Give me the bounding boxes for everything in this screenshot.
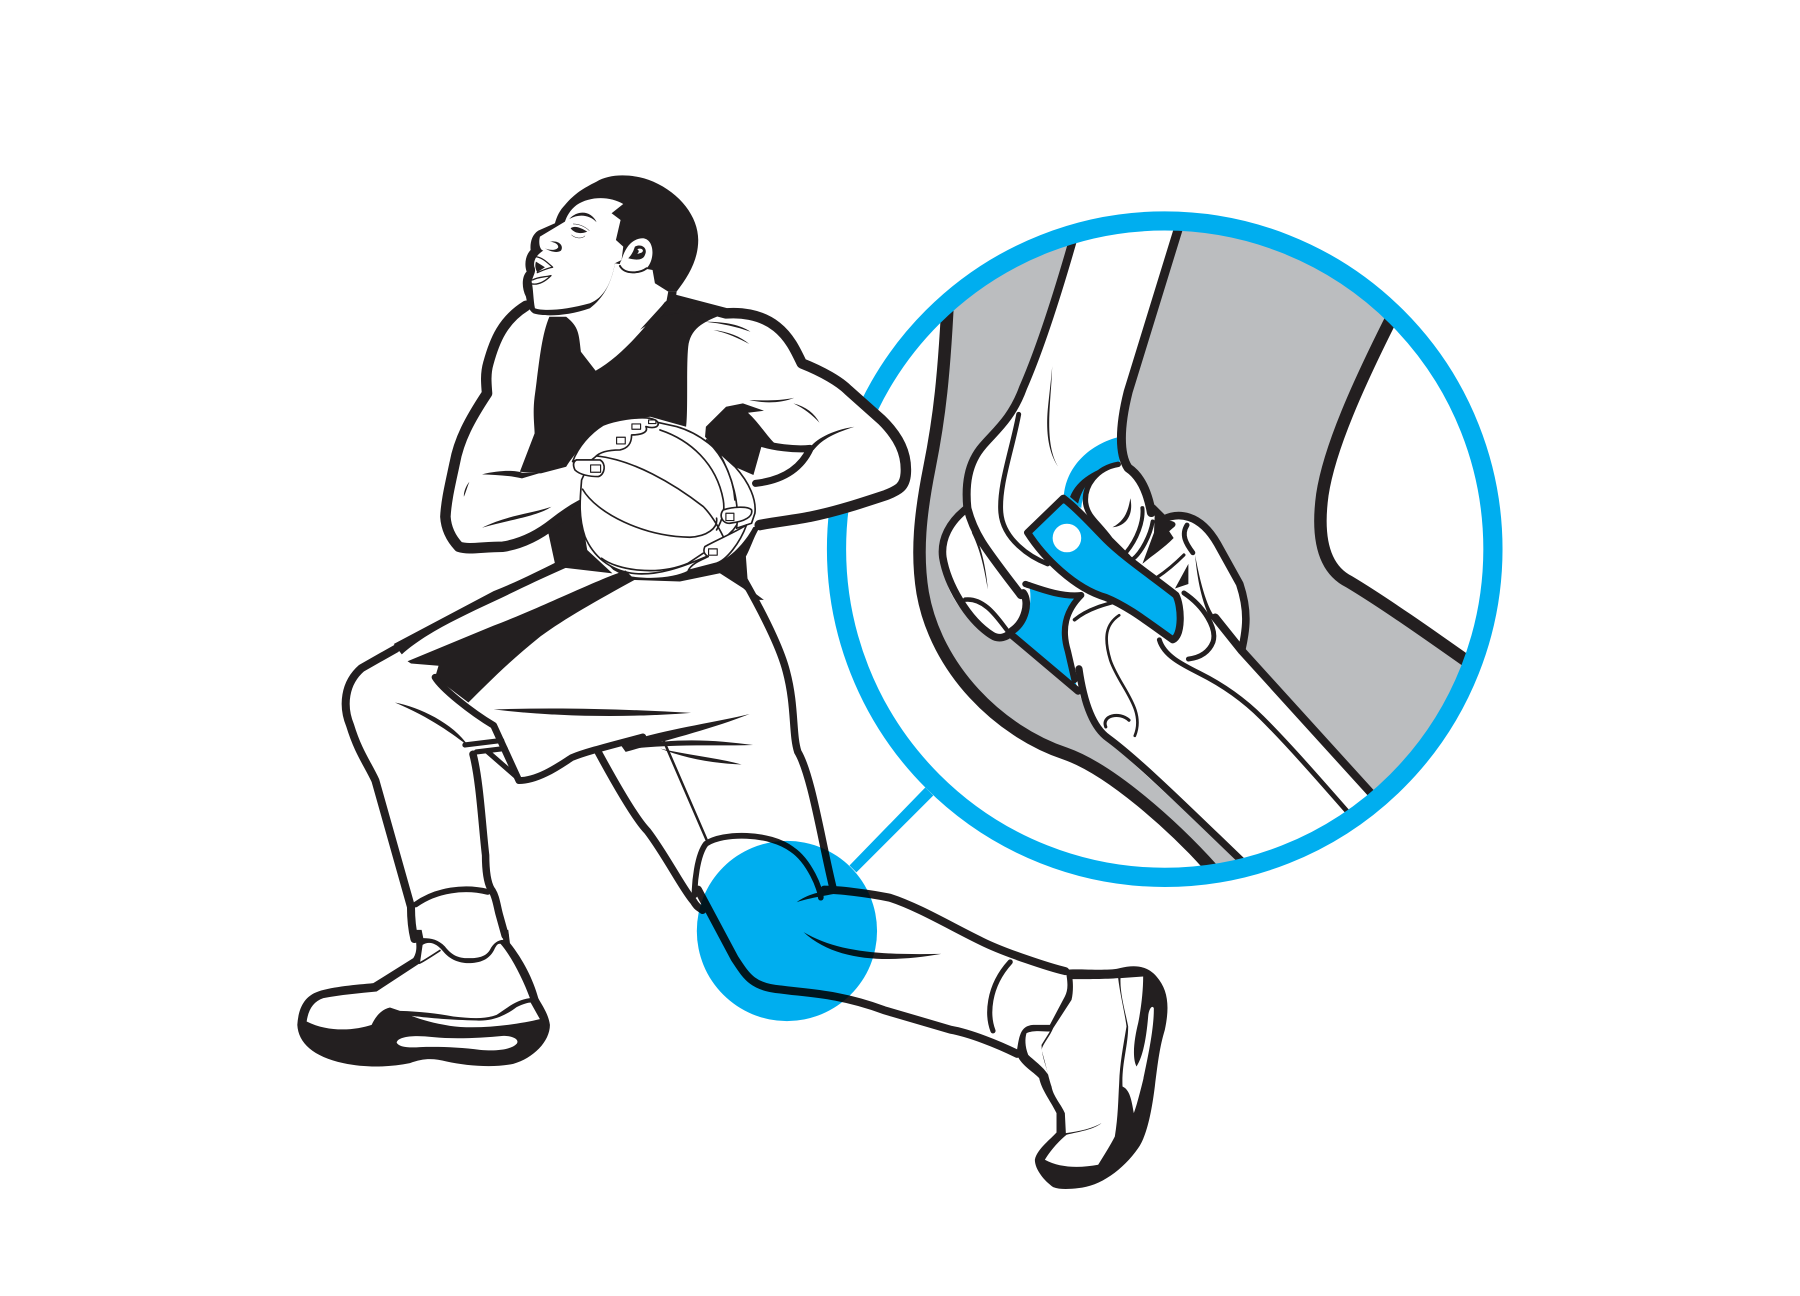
top hand	[573, 418, 658, 462]
knee cap outline	[695, 836, 821, 898]
hair and head outline	[523, 175, 698, 315]
blue cartilage lower	[1015, 588, 1077, 686]
blue meniscus	[1028, 498, 1180, 640]
torso and arms white fill	[445, 300, 906, 577]
wrist	[718, 452, 755, 528]
white dot on meniscus	[1053, 524, 1081, 552]
neck to jersey join	[640, 292, 703, 330]
shorts right side line	[744, 580, 833, 890]
eyebrow	[569, 213, 597, 222]
shorts hem	[435, 677, 643, 781]
outer leg outlines	[919, 262, 1213, 870]
right condyle and ligaments	[1153, 508, 1246, 649]
back thigh line	[598, 752, 703, 910]
waist shadow below ball	[603, 524, 764, 600]
player torso and arms	[445, 300, 906, 577]
femur and tendon lines	[967, 227, 1077, 595]
arm muscle lines	[749, 398, 794, 402]
back sock line	[990, 962, 1010, 1031]
eye	[571, 227, 587, 233]
sock top	[416, 889, 488, 905]
player shorts and legs	[346, 558, 1065, 1054]
thumb	[574, 460, 604, 477]
ear	[620, 238, 652, 272]
blue knee highlight	[697, 841, 877, 1021]
gray soft tissue	[926, 231, 1462, 866]
blue cartilage upper arc	[1064, 438, 1120, 508]
mouth	[535, 262, 545, 272]
jersey below arm	[548, 505, 612, 573]
basketball and hands	[573, 418, 764, 600]
shorts waistband	[394, 558, 595, 654]
ball	[580, 420, 743, 574]
back shoe	[1017, 966, 1167, 1189]
tibia lines	[1012, 635, 1078, 691]
magnifier ring	[837, 221, 1493, 877]
shin outline	[698, 890, 1017, 1054]
right arm outline	[676, 300, 906, 525]
front shoe	[297, 930, 550, 1067]
femoral condyle lobe	[942, 508, 1026, 638]
player head	[523, 175, 703, 330]
ball seams	[583, 430, 735, 571]
armpit shadow	[705, 403, 777, 475]
face	[532, 198, 623, 310]
jersey	[520, 300, 726, 473]
forearm inner curve	[756, 443, 810, 483]
lower hand fingers	[721, 507, 752, 523]
left arm muscle lines	[482, 471, 541, 478]
knee anatomy illustration scene	[297, 175, 1503, 1189]
left arm outline	[445, 306, 581, 548]
connector line between knee and magnified circle	[849, 787, 933, 872]
patella lines	[1085, 464, 1128, 557]
nose	[545, 241, 562, 252]
white bones	[943, 200, 1371, 865]
magnified knee panel	[837, 200, 1534, 883]
left leg outline	[346, 649, 414, 939]
fingernails	[591, 420, 734, 555]
shorts dark panel	[408, 571, 635, 703]
